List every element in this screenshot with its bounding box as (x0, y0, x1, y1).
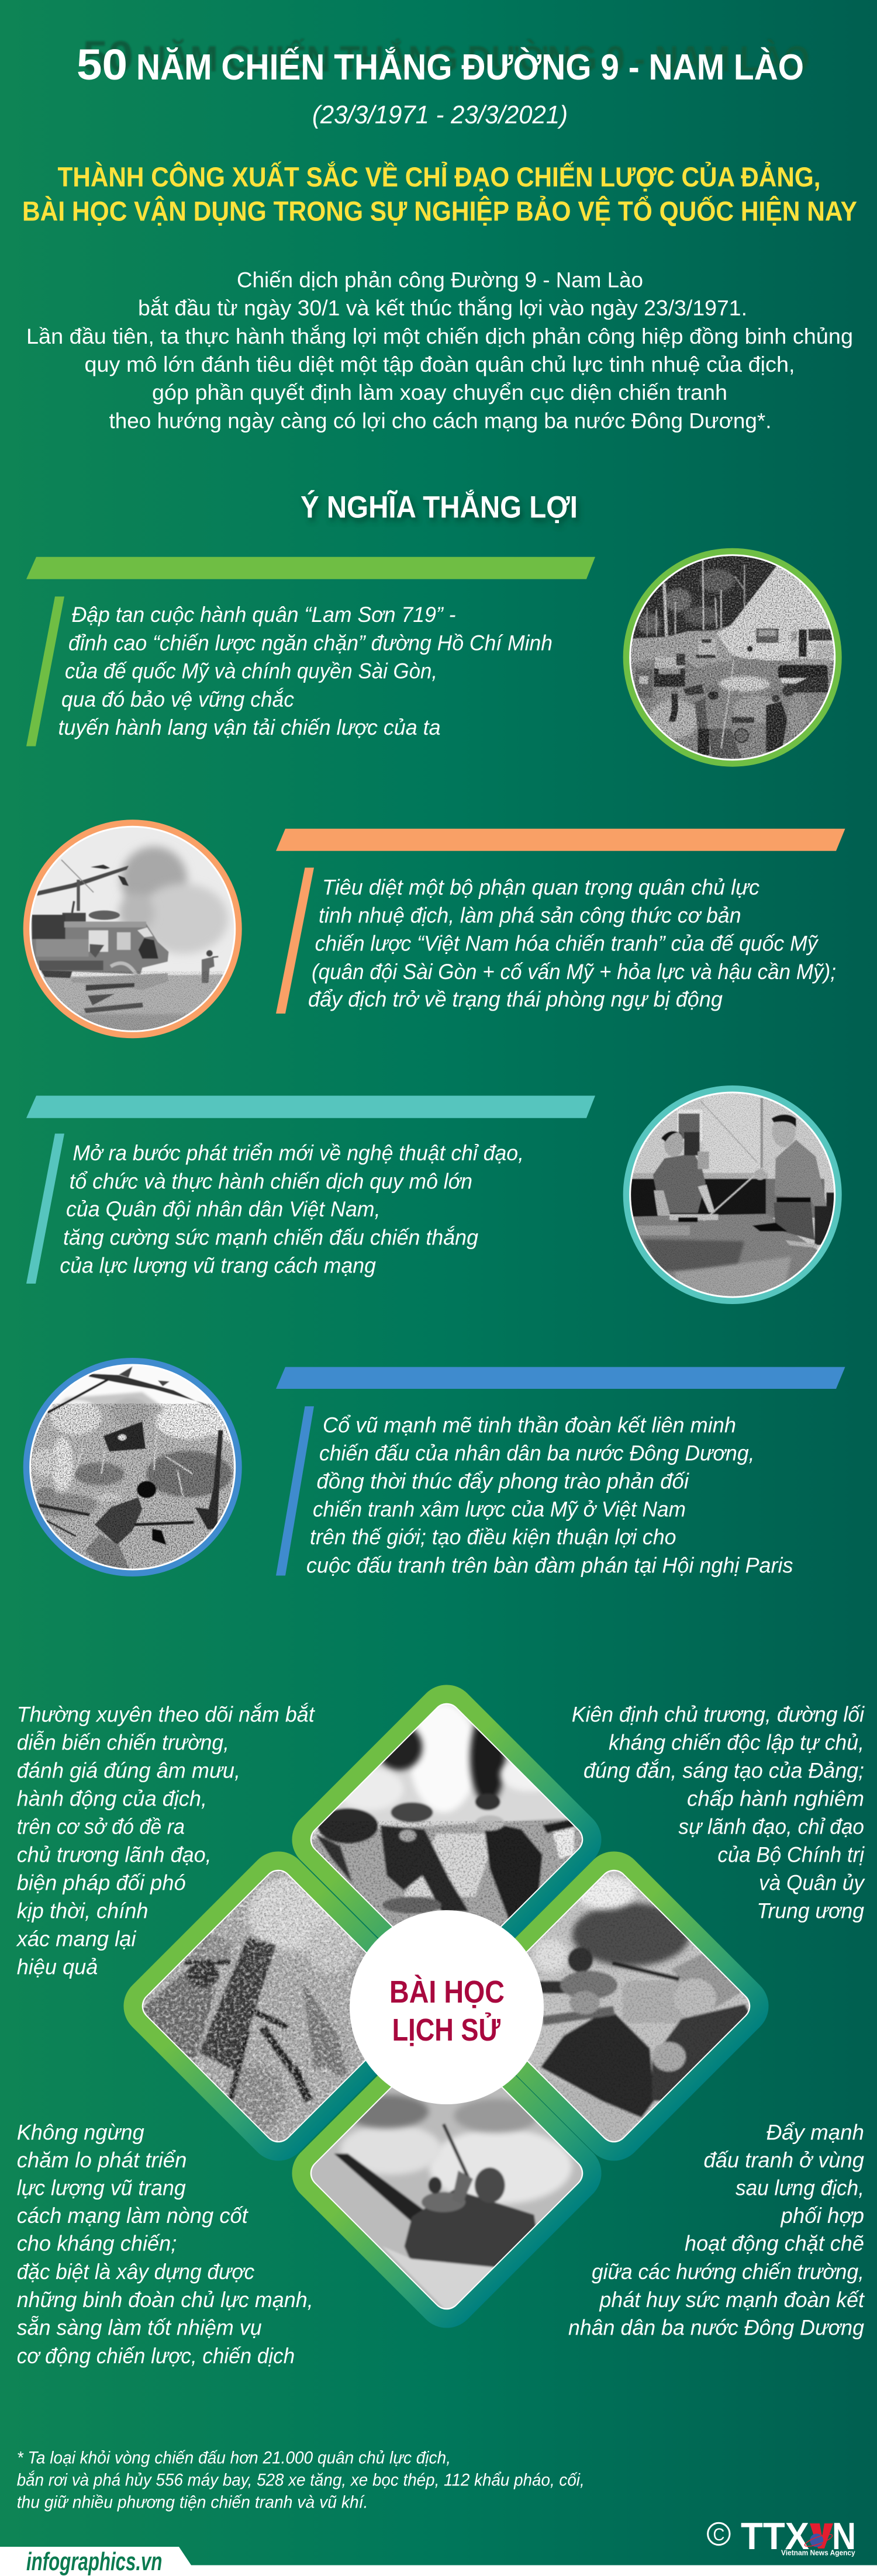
lesson text: bottom left: cho kháng chiến; (17, 2232, 177, 2256)
teal bar (26, 1095, 595, 1118)
intro text: quy mô lớn đánh tiêu diệt một tập đoàn quân chủ lực tinh nhuệ của địch, (84, 352, 795, 376)
photo: wrecked helicopter (18, 815, 246, 1043)
logo: TTXVN: TTX (741, 2515, 809, 2557)
slanted side bar (26, 596, 64, 746)
footnote: thu giữ nhiều phương tiện chiến tranh và vũ khí. (17, 2492, 368, 2512)
lesson text: top right (572, 1702, 865, 1923)
lesson text: top right: chấp hành nghiêm (687, 1786, 864, 1811)
lesson text: bottom right: phát huy sức mạnh đoàn kết (599, 2288, 865, 2312)
photo: road building (620, 544, 848, 772)
meaning 1 text: của đế quốc Mỹ và chính quyền Sài Gòn, (65, 659, 437, 683)
date subtitle: (23/3/1971 - 23/3/2021) (312, 101, 568, 129)
lesson text: top left: chủ trương lãnh đạo, (17, 1842, 212, 1867)
meaning 4 text: Cổ vũ mạnh mẽ tinh thần đoàn kết liên minh (323, 1413, 736, 1437)
lesson text: bottom left: chăm lo phát triển (17, 2148, 187, 2172)
lesson text: bottom right (568, 2121, 865, 2339)
lesson text: top right: Kiên định chủ trương, đường lối (572, 1702, 865, 1727)
lesson text: bottom right: Đẩy mạnh (766, 2121, 864, 2144)
lesson text: bottom left: đặc biệt là xây dựng được (17, 2260, 255, 2284)
logo: TTXVN: Vietnam News Agency (781, 2549, 855, 2557)
lesson text: bottom left: cách mạng làm nòng cốt (17, 2204, 248, 2228)
meaning 2 text: chiến lược “Việt Nam hóa chiến tranh” của đế quốc Mỹ (315, 932, 819, 956)
title: NĂM CHIẾN THẮNG ĐƯỜNG 9 - NAM LÀO (136, 47, 804, 88)
footnote (17, 2449, 585, 2512)
logo: TTXVN (708, 2515, 856, 2557)
yellow headline (22, 161, 857, 227)
lesson text: bottom left: sẵn sàng làm tốt nhiệm vụ (17, 2315, 262, 2339)
lesson text: top left: xác mang lại (16, 1927, 137, 1951)
meaning 1 text: qua đó bảo vệ vững chắc (61, 687, 294, 711)
slanted side bar (26, 1133, 64, 1284)
panel: meaning 3 (26, 1081, 848, 1309)
meaning 3 text: Mở ra bước phát triển mới về nghệ thuật chỉ đạo, (72, 1141, 524, 1165)
meaning 3 text: của lực lượng vũ trang cách mạng (60, 1253, 376, 1278)
title: NĂM CHIẾN THẮNG ĐƯỜNG 9 - NAM LÀO (142, 39, 810, 79)
meaning 2 text (308, 875, 836, 1011)
footnote: bắn rơi và phá hủy 556 máy bay, 528 xe tăng, xe bọc thép, 112 khẩu pháo, cối, (17, 2470, 585, 2490)
intro text (26, 268, 853, 433)
lesson text: bottom left: Không ngừng (17, 2121, 144, 2144)
meaning 4 text: cuộc đấu tranh trên bàn đàm phán tại Hội nghị Paris (306, 1554, 793, 1578)
lesson text: top left: biện pháp đối phó (17, 1870, 186, 1895)
section heading: Ý NGHĨA THẮNG LỢI (303, 493, 580, 528)
lesson text: bottom right: sau lưng địch, (736, 2176, 864, 2200)
title (77, 32, 810, 89)
meaning 3 text (60, 1141, 524, 1278)
lesson text: top right: và Quân ủy (759, 1870, 865, 1895)
lesson text: top left: diễn biến chiến trường, (17, 1730, 229, 1755)
footnote: * Ta loại khỏi vòng chiến đấu hơn 21.000 quân chủ lực địch, (17, 2449, 451, 2468)
lesson text: top left: đánh giá đúng âm mưu, (17, 1758, 240, 1783)
intro text: góp phần quyết định làm xoay chuyển cục diện chiến tranh (152, 381, 727, 404)
meaning 4 text: chiến đấu của nhân dân ba nước Đông Dương, (319, 1441, 754, 1465)
lesson text: top right: của Bộ Chính trị (717, 1842, 865, 1867)
intro text: Lần đầu tiên, ta thực hành thắng lợi một chiến dịch phản công hiệp đồng binh chủng (26, 324, 853, 348)
meaning 3 text: tổ chức và thực hành chiến dịch quy mô lớn (70, 1169, 472, 1193)
slanted side bar (276, 1406, 314, 1576)
intro text: theo hướng ngày càng có lợi cho cách mạng ba nước Đông Dương*. (109, 409, 772, 433)
intro text: Chiến dịch phản công Đường 9 - Nam Lào (237, 268, 643, 292)
lesson text: bottom left: cơ động chiến lược, chiến dịch (17, 2344, 295, 2368)
slanted side bar (276, 867, 314, 1014)
lesson text: bottom left (17, 2121, 313, 2368)
lesson text: bottom right: nhân dân ba nước Đông Dương (568, 2315, 864, 2339)
logo: TTXVN: N (832, 2515, 856, 2557)
meaning 1 text (58, 603, 553, 739)
lesson text: bottom left: lực lượng vũ trang (17, 2176, 186, 2200)
lesson text: top right: kháng chiến độc lập tự chủ, (609, 1730, 864, 1755)
lesson text: top left (16, 1702, 315, 1979)
photo: soldier with flag (18, 1353, 246, 1581)
meaning 2 text: Tiêu diệt một bộ phận quan trọng quân chủ lực (322, 875, 759, 899)
blue bar (276, 1367, 845, 1389)
center circle: historic lessons: LỊCH SỬ (392, 2013, 500, 2048)
diamond: left photo (112, 1839, 445, 2173)
meaning 3 text: của Quân đội nhân dân Việt Nam, (66, 1197, 380, 1221)
green bar (26, 557, 595, 579)
meaning 4 text: đồng thời thúc đẩy phong trào phản đối (317, 1469, 690, 1493)
lesson text: bottom right: giữa các hướng chiến trường, (592, 2260, 864, 2284)
meaning 2 text: tinh nhuệ địch, làm phá sản công thức cơ bản (319, 904, 741, 927)
intro text: bắt đầu từ ngày 30/1 và kết thúc thắng lợi vào ngày 23/3/1971. (138, 296, 747, 320)
photo: commanders at map table (620, 1081, 848, 1309)
section heading: Ý NGHĨA THẮNG LỢI (301, 489, 578, 525)
logo: TTXVN: C (713, 2525, 725, 2544)
lesson text: top right: Trung ương (757, 1899, 864, 1923)
panel: meaning 2 (18, 815, 845, 1043)
panel: meaning 1 (26, 544, 848, 772)
lesson text: top right: sự lãnh đạo, chỉ đạo (678, 1814, 864, 1839)
lesson text: top left: Thường xuyên theo dõi nắm bắt (17, 1702, 315, 1727)
meaning 4 text: trên thế giới; tạo điều kiện thuận lợi cho (310, 1525, 676, 1549)
meaning 1 text: Đập tan cuộc hành quân “Lam Sơn 719” - (71, 603, 456, 627)
lesson text: bottom right: hoạt động chặt chẽ (685, 2232, 864, 2256)
orange bar (276, 829, 845, 851)
footer strip (0, 2547, 877, 2576)
lesson text: bottom left: những binh đoàn chủ lực mạnh, (17, 2288, 313, 2312)
title: 50 (82, 32, 133, 81)
diamond: top photo (280, 1673, 613, 2006)
center circle: historic lessons: BÀI HỌC (389, 1975, 505, 2010)
meaning 2 text: (quân đội Sài Gòn + cố vấn Mỹ + hỏa lực và hậu cần Mỹ); (312, 960, 836, 984)
lesson text: top left: trên cơ sở đó đề ra (17, 1814, 185, 1839)
center circle: historic lessons (350, 1910, 544, 2104)
diamond: bottom photo (280, 2007, 613, 2340)
lesson text: top right: đúng đắn, sáng tạo của Đảng; (583, 1758, 864, 1783)
panel: meaning 4 (18, 1353, 845, 1581)
meaning 4 text (306, 1413, 793, 1578)
diamond: right photo (447, 1839, 781, 2173)
lesson text: bottom right: đấu tranh ở vùng (704, 2148, 864, 2172)
lesson text: top left: hiệu quả (17, 1955, 98, 1979)
meaning 4 text: chiến tranh xâm lược của Mỹ ở Việt Nam (313, 1497, 686, 1521)
footer strip: infographics.vn (26, 2547, 163, 2576)
meaning 1 text: tuyến hành lang vận tải chiến lược của ta (58, 715, 441, 739)
meaning 1 text: đỉnh cao “chiến lược ngăn chặn” đường Hồ Chí Minh (68, 631, 553, 655)
lesson text: top left: kịp thời, chính (17, 1899, 149, 1923)
meaning 3 text: tăng cường sức mạnh chiến đấu chiến thắng (63, 1226, 478, 1250)
title: 50 (77, 40, 127, 89)
lesson text: top left: hành động của địch, (17, 1786, 207, 1811)
meaning 2 text: đẩy địch trở về trạng thái phòng ngự bị động (308, 987, 723, 1011)
lesson text: bottom right: phối hợp (781, 2204, 864, 2228)
